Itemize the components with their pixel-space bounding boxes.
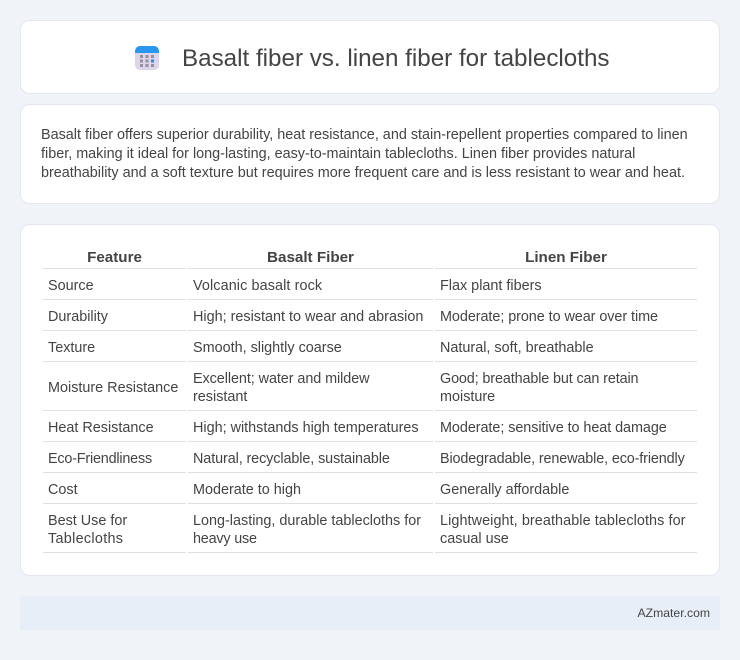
table: Good; breathable but can retain bbox=[440, 371, 638, 387]
row: best use: Best Use for bbox=[48, 513, 127, 529]
table: Smooth, slightly coarse bbox=[193, 340, 342, 356]
row: best use: Tablecloths bbox=[48, 531, 123, 547]
table: Generally affordable bbox=[440, 482, 569, 498]
table: resistant bbox=[193, 389, 247, 405]
panel: header bbox=[20, 20, 720, 94]
table: heavy use bbox=[193, 531, 257, 547]
panel: comparison table bbox=[20, 224, 720, 576]
title: Basalt fiber vs. linen fiber for tablecloths bbox=[182, 45, 610, 72]
table: High; resistant to wear and abrasion bbox=[193, 309, 423, 325]
header: feature: Feature bbox=[87, 249, 142, 266]
summary text bbox=[41, 127, 688, 181]
table: Moderate; sensitive to heat damage bbox=[440, 420, 667, 436]
row: texture: Texture bbox=[48, 340, 95, 356]
table: Flax plant fibers bbox=[440, 278, 542, 294]
header: linen fiber: Linen Fiber bbox=[525, 249, 607, 266]
row: source: Source bbox=[48, 278, 94, 294]
footer text: AZmater.com bbox=[638, 606, 710, 620]
table: Natural, recyclable, sustainable bbox=[193, 451, 390, 467]
header: basalt fiber: Basalt Fiber bbox=[267, 249, 354, 266]
row: durability: Durability bbox=[48, 309, 108, 325]
row: best use bbox=[48, 513, 127, 547]
icon: calendar bbox=[135, 46, 159, 70]
panel: summary bbox=[20, 104, 720, 204]
table: Biodegradable, renewable, eco-friendly bbox=[440, 451, 685, 467]
table: Excellent; water and mildew bbox=[193, 371, 369, 387]
table: Moderate to high bbox=[193, 482, 301, 498]
table: High; withstands high temperatures bbox=[193, 420, 419, 436]
table: Lightweight, breathable tablecloths for bbox=[440, 513, 686, 529]
footer bar bbox=[20, 596, 720, 630]
summary text: breathability and a soft texture but requires more frequent care and is less resistant to wear and heat. bbox=[41, 165, 685, 181]
row: cost: Cost bbox=[48, 482, 78, 498]
table: Natural, soft, breathable bbox=[440, 340, 594, 356]
table: Long-lasting, durable tablecloths for bbox=[193, 513, 421, 529]
row: heat resistance: Heat Resistance bbox=[48, 420, 154, 436]
row: moisture resistance: Moisture Resistance bbox=[48, 380, 178, 396]
summary text: fiber, making it ideal for long-lasting, easy-to-maintain tablecloths. Linen fiber provides natural bbox=[41, 146, 635, 162]
table: casual use bbox=[440, 531, 509, 547]
table: Volcanic basalt rock bbox=[193, 278, 322, 294]
summary text: Basalt fiber offers superior durability, heat resistance, and stain-repellent properties compared to linen bbox=[41, 127, 688, 143]
table: Moderate; prone to wear over time bbox=[440, 309, 658, 325]
table: moisture bbox=[440, 389, 495, 405]
row: eco-friendliness: Eco-Friendliness bbox=[48, 451, 152, 467]
